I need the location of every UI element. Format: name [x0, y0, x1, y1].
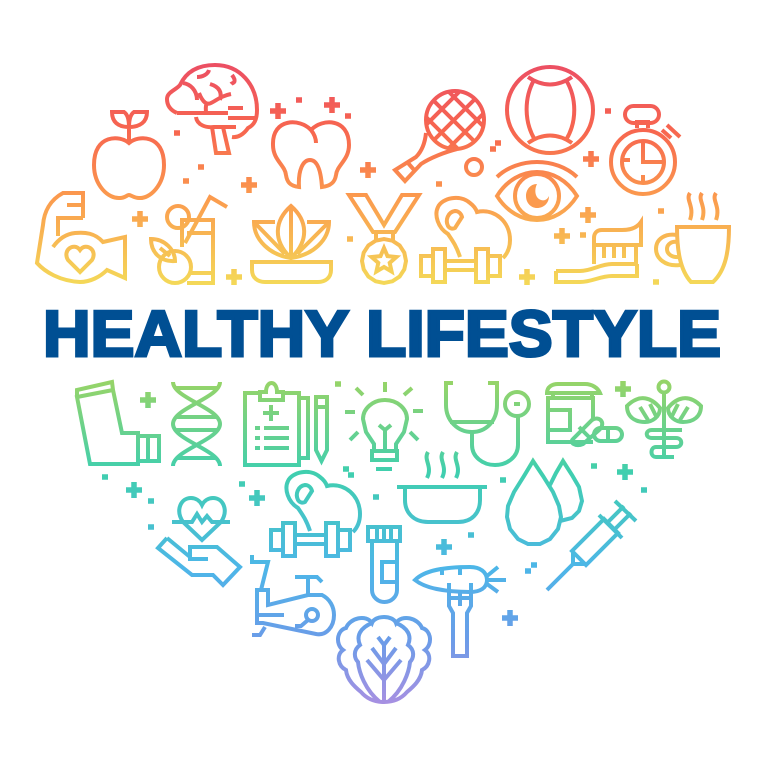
icon: inhaler — [77, 382, 159, 464]
icon: flexed arm with heart — [37, 193, 125, 282]
icon: apple — [94, 112, 164, 198]
icon: dumbbell and kettle — [421, 198, 510, 282]
icon: heart in hand — [158, 498, 240, 585]
icon: ball — [507, 67, 593, 153]
icon: steaming bowl — [397, 452, 487, 522]
icon: smoothie glass — [151, 197, 227, 283]
icon: stopwatch — [611, 106, 680, 194]
icon: eye — [497, 162, 577, 220]
icon: water drops — [507, 461, 582, 544]
icon: brain — [167, 65, 257, 153]
icon: medal — [349, 195, 419, 283]
icon: lotus plant — [252, 206, 331, 282]
icon: clipboard and pencil — [245, 383, 327, 465]
infographic canvas — [34, 63, 731, 704]
icon: stethoscope — [446, 383, 529, 465]
decorations: bottom sparkles — [102, 381, 647, 626]
icon: lightbulb — [345, 382, 423, 469]
icon: small ring — [466, 159, 482, 175]
icon: lettuce — [338, 617, 430, 702]
icon: toothbrush — [556, 222, 641, 282]
title: HEALTHY LIFESTYLE — [43, 297, 721, 370]
icon: DNA helix — [173, 382, 220, 466]
icon: exercise bike — [252, 555, 334, 635]
icon: coffee cup — [656, 193, 729, 282]
icon: caduceus — [627, 382, 701, 458]
icon: medicine jar and pills — [547, 384, 622, 445]
icon: carrot on fork — [415, 567, 506, 656]
icon: test tube — [368, 527, 400, 602]
decorations: top sparkles — [132, 97, 664, 285]
icon: dumbbell and kettle, lower — [271, 472, 360, 556]
icon: tooth — [273, 122, 349, 187]
icon: syringe — [547, 501, 636, 590]
icon: tennis racket — [392, 89, 486, 184]
